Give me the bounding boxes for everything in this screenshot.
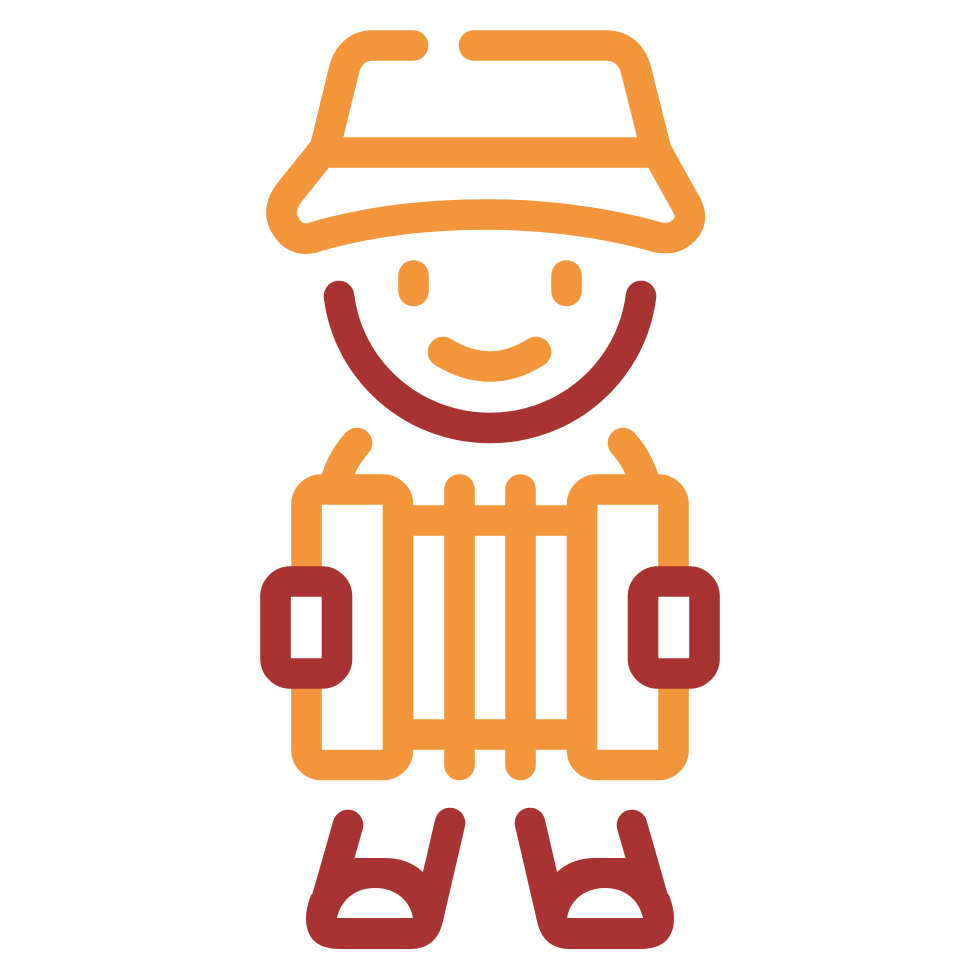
right strap [623,443,644,480]
left bellows end [306,490,398,765]
bellows bands [398,520,582,734]
bellows folds [460,490,520,765]
right bellows end [582,490,674,765]
eyes [414,276,566,291]
left foot [306,823,450,949]
right foot [530,823,674,949]
accordion [306,443,674,765]
face outline [339,296,641,428]
right hand [643,582,704,674]
left hand [276,582,337,674]
left strap [336,443,357,480]
smile [443,352,536,366]
hat [281,46,690,239]
